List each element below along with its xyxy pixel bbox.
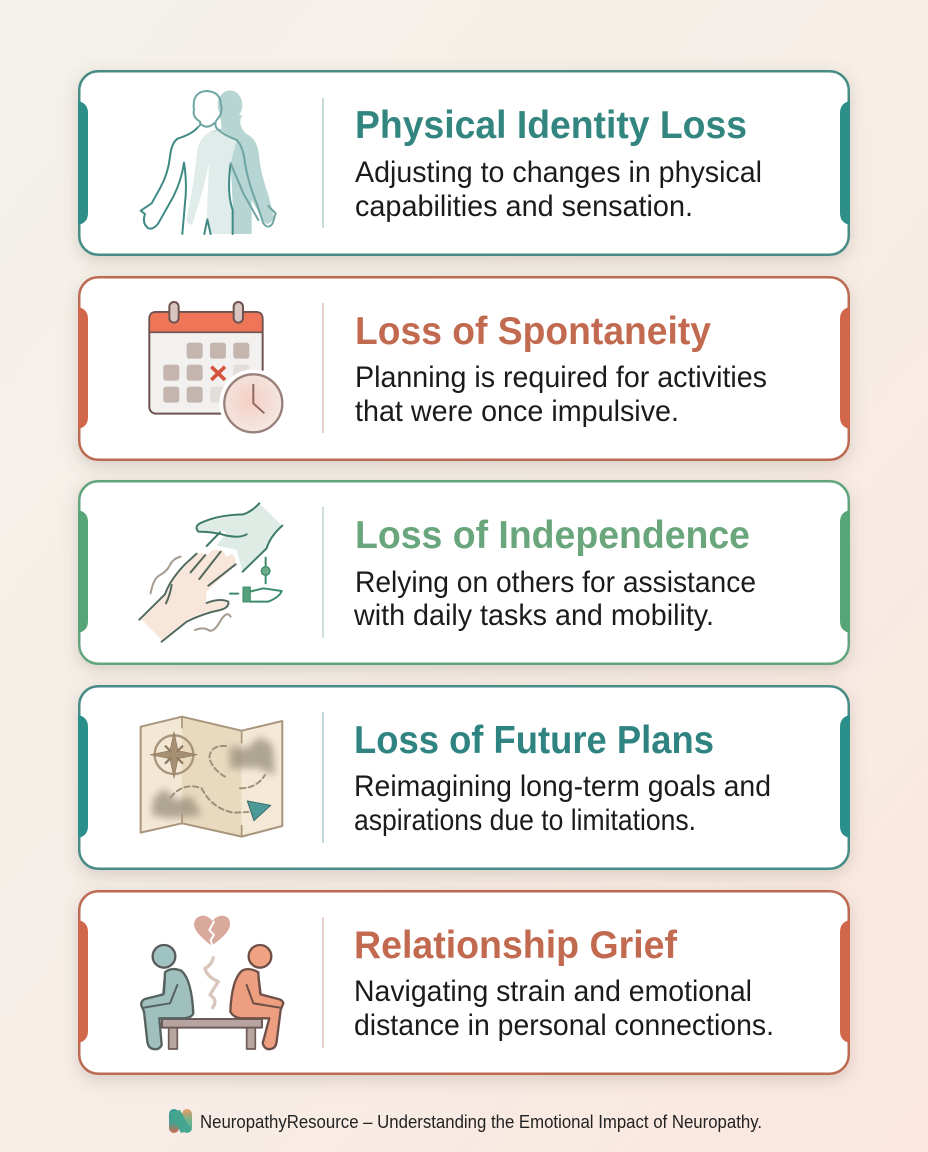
text block: Adjusting to changes in physical: [355, 156, 762, 189]
panel: loss of independence: [78, 481, 850, 664]
text block: Navigating strain and emotional: [354, 975, 752, 1008]
panel: loss of future plans: [78, 686, 850, 869]
heading: Physical Identity Loss: [355, 104, 747, 147]
panel: relationship grief: [78, 891, 850, 1074]
icon: couple on a bench: [141, 916, 283, 1049]
text block: that were once impulsive.: [355, 395, 679, 428]
heading: Loss of Future Plans: [354, 719, 714, 762]
heading: Loss of Independence: [355, 514, 750, 557]
icon: footer logo: [169, 1109, 192, 1133]
text block: with daily tasks and mobility.: [353, 599, 714, 632]
footer: [169, 1109, 762, 1133]
text block: Relying on others for assistance: [355, 566, 756, 599]
panel: loss of spontaneity: [78, 277, 850, 460]
icon: calendar and clock: [149, 302, 287, 437]
panel: physical identity loss: [78, 71, 850, 255]
icon: body silhouette: [141, 90, 276, 234]
text block: aspirations due to limitations.: [354, 804, 696, 837]
heading: Relationship Grief: [354, 924, 678, 967]
text block: distance in personal connections.: [354, 1009, 774, 1042]
icon: faded map: [141, 717, 282, 837]
heading: Loss of Spontaneity: [355, 310, 711, 353]
text block: Planning is required for activities: [355, 361, 767, 394]
footer text: NeuropathyResource – Understanding the Emotional Impact of Neuropathy.: [200, 1112, 762, 1132]
text block: capabilities and sensation.: [355, 190, 693, 223]
text block: Reimagining long-term goals and: [354, 770, 771, 803]
icon: helping hands: [139, 503, 282, 642]
